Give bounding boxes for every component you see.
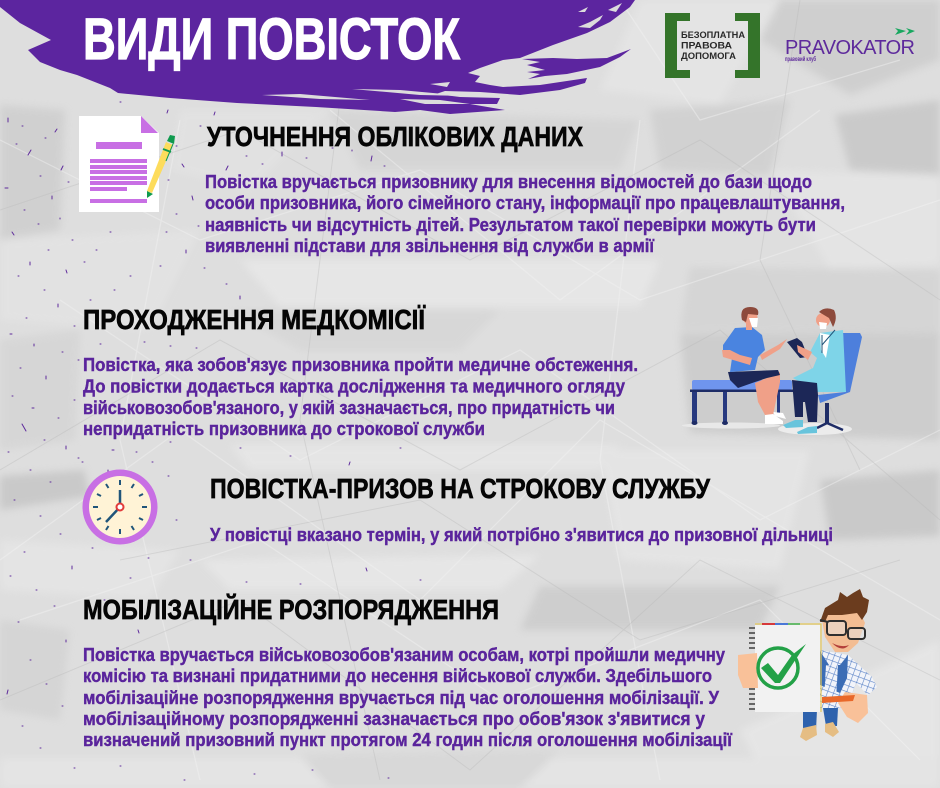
title brush stroke — [0, 0, 635, 114]
logo: free legal aid: БЕЗОПЛАТНА — [681, 30, 746, 40]
text: section 4: мобілізаційне розпорядження вручається під час оголошення мобілізації. У — [83, 688, 720, 708]
heading: section 3: ПОВІСТКА-ПРИЗОВ НА СТРОКОВУ СЛУЖБУ — [210, 473, 710, 504]
text: section 1: наявність чи відсутність дітей. Результатом такої перевірки можуть бути — [205, 215, 816, 235]
logo: Pravokator — [785, 28, 915, 63]
logo: Pravokator: правовий клуб — [785, 56, 816, 63]
icon: clock — [82, 470, 158, 544]
text: section 4: мобілізаційному розпорядженні зазначається про обов'язок з'явитися у — [83, 709, 705, 729]
text: section 4: визначений призовний пункт протягом 24 годин після оголошення мобілізації — [83, 730, 733, 750]
logo: Pravokator: PRAVOKATOR — [785, 37, 915, 59]
illustration: patient and doctor — [682, 307, 862, 435]
illustration: man with checklist — [738, 589, 877, 741]
text: section 4: Повістка вручається військовозобов'язаним особам, котрі пройшли медичну — [83, 645, 725, 665]
logo: free legal aid: ПРАВОВА — [681, 40, 733, 50]
text: section 2: непридатність призовника до строкової служби — [83, 419, 485, 439]
brush stroke highlights — [262, 3, 622, 104]
ink spatter — [5, 102, 421, 780]
icon: document and pencil — [79, 116, 175, 212]
text: section 1: особи призовника, його сімейного стану, інформації про працевлаштування, — [205, 193, 845, 213]
text: section 2: До повістки додається картка дослідження та медичного огляду — [83, 376, 625, 396]
text: section 2: Повістка, яка зобов'язує призовника пройти медичне обстеження. — [83, 355, 638, 375]
heading: section 4: МОБІЛІЗАЦІЙНЕ РОЗПОРЯДЖЕННЯ — [83, 593, 499, 625]
heading: section 1: УТОЧНЕННЯ ОБЛІКОВИХ ДАНИХ — [207, 121, 583, 152]
text: section 2: військовозобов'язаного, у якій зазначається, про придатність чи — [83, 398, 615, 418]
text: section 4 — [83, 645, 733, 750]
text: section 1: виявленні підстави для звільнення від служби в армії — [205, 236, 655, 256]
heading: section 2: ПРОХОДЖЕННЯ МЕДКОМІСІЇ — [83, 304, 426, 335]
logo: free legal aid — [665, 13, 760, 78]
text: section 2 — [83, 355, 638, 439]
text: section 1 — [205, 172, 845, 256]
text: section 1: Повістка вручається призовнику для внесення відомостей до бази щодо — [205, 172, 812, 192]
title: ВИДИ ПОВІСТОК — [83, 7, 460, 72]
text: section 3: У повістці вказано термін, у який потрібно з'явитися до призовної дільниці — [210, 525, 833, 545]
logo: free legal aid: ДОПОМОГА — [681, 51, 737, 61]
text: section 4: комісію та визнані придатними до несення військової служби. Здебільшого — [83, 666, 712, 686]
